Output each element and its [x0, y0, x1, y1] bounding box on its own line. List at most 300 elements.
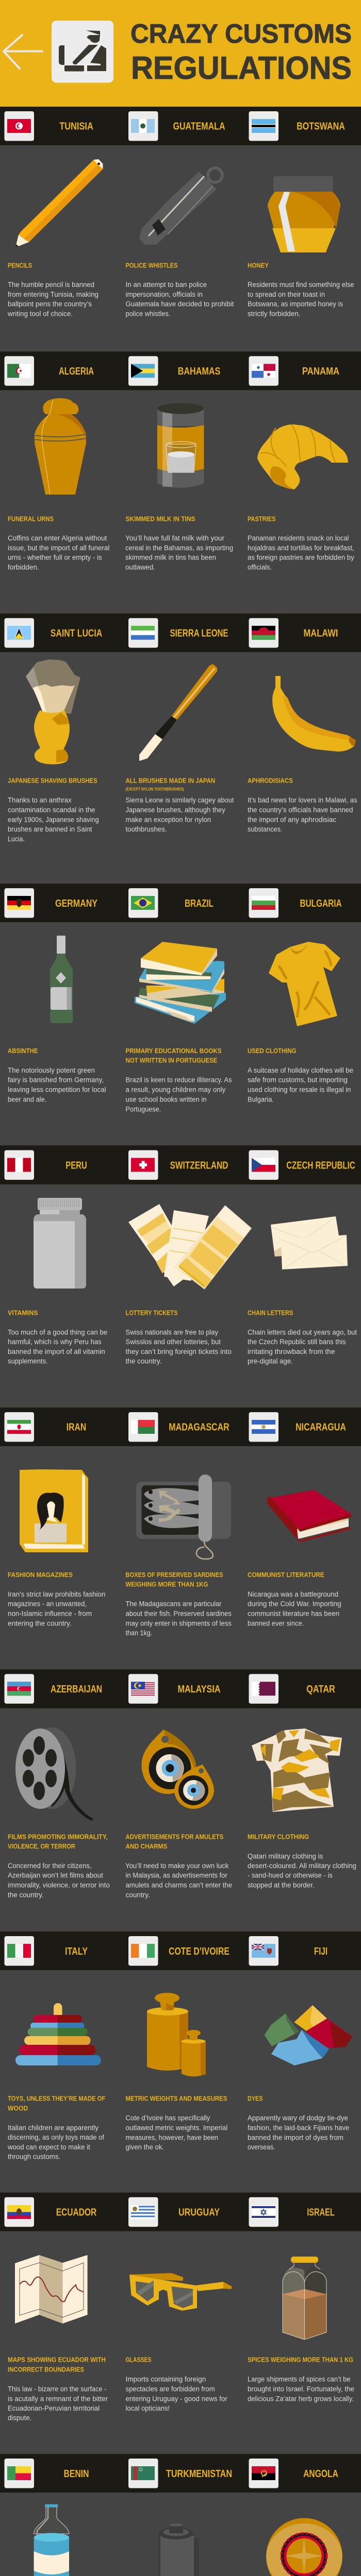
text block: Italian children are apparently [8, 2124, 99, 2131]
text block: desert-coloured. All military clothing [248, 1862, 356, 1870]
text block: It’s bad news for lovers in Malawi, as [248, 796, 357, 804]
text block: a result, young children may only [126, 1086, 225, 1094]
country name: Iran: IRAN [67, 1422, 86, 1433]
icon: absinthe bottle [50, 936, 73, 1023]
item: spices weighing more than 1 kg [248, 2257, 354, 2402]
text block [248, 2114, 349, 2151]
text block: from entering Tunisia, making [8, 291, 99, 298]
icon: left arrow [4, 35, 42, 69]
text block: issue, but the import of all funeral [8, 544, 109, 552]
text block: Panaman residents snack on local [248, 534, 349, 542]
heading: absinthe: ABSINTHE [8, 1047, 38, 1055]
band: Azerbaijan, Malaysia, Qatar [0, 1669, 361, 1708]
icon: red book [267, 1490, 352, 1542]
text block: make an exception for nylon [126, 816, 211, 823]
country name: Germany: GERMANY [55, 898, 98, 909]
heading: maps showing Ecuador: INCORRECT BOUNDARIES [8, 2365, 84, 2373]
note: (EXCEPT NYLON TOOTHBRUSHES) [126, 787, 184, 791]
heading: advertisements for amulets: AND CHARMS [126, 1842, 168, 1850]
text block: wood can expect to make it [7, 2143, 90, 2151]
text block: Brazil is keen to reduce illiteracy. As [126, 1076, 232, 1084]
heading: lottery tickets: LOTTERY TICKETS [126, 1309, 178, 1316]
icon: whistle [139, 168, 222, 245]
item: metric weights and measures [126, 1993, 227, 2151]
item: all brushes made in Japan [126, 664, 234, 833]
text block: entering the country. [8, 1619, 72, 1627]
icon: customs officer sign [52, 21, 113, 82]
country name: Malaysia: MALAYSIA [177, 1684, 221, 1695]
text block: Botswana, as imported honey is [248, 300, 343, 308]
item: boxes of preserved sardines [126, 1475, 232, 1637]
icon: film canister [159, 2523, 199, 2576]
flag: Germany [7, 896, 31, 910]
flag: Cote d'Ivoire [131, 1944, 155, 1958]
heading: boxes of preserved sardines: BOXES OF PRESERVED SARDINES [126, 1571, 223, 1579]
text block: Portuguese. [126, 1105, 161, 1113]
text block: pre-digital age. [248, 1358, 293, 1365]
icon: honey jar [268, 176, 340, 252]
text block: Residents must find something else [248, 281, 354, 289]
text block: Sierra Leone is similarly cagey about [126, 796, 234, 804]
heading: police whistles: POLICE WHISTLES [126, 261, 178, 269]
flag: Israel [252, 2205, 275, 2219]
text block: - sand-hued or otherwise - is [248, 1872, 333, 1879]
heading: honey: HONEY [248, 261, 269, 269]
item: pastries [248, 425, 354, 571]
text block [125, 1862, 232, 1899]
item: advertisements for amulets [125, 1730, 232, 1899]
text block: Azerbaijan won’t let films about [8, 1872, 103, 1879]
text block [8, 1328, 107, 1365]
text block: fairy is banished from Germany, [8, 1076, 104, 1084]
text block: entering Uruguay - good news for [126, 2395, 227, 2402]
text block: beer and ale. [8, 1095, 46, 1103]
text block: the country. [8, 1891, 44, 1899]
icon: sardine can [136, 1475, 231, 1559]
text block [126, 1600, 232, 1637]
text block: the country’s officials have banned [248, 806, 353, 814]
heading: primary educational books [126, 1047, 222, 1064]
text block: early 1900s, Japanese shaving [8, 816, 99, 823]
item: toys [7, 2003, 105, 2161]
heading: pastries: PASTRIES [248, 515, 276, 522]
flag: Fiji [252, 1944, 275, 1958]
text block: through customs. [8, 2153, 60, 2161]
text block: substances. [248, 825, 282, 833]
text block [126, 2376, 227, 2412]
text block: outlawed metric weights. Imperial [126, 2124, 227, 2131]
heading: advertisements for amulets: ADVERTISEMENTS FOR AMULETS [126, 1833, 223, 1840]
heading: glasses: GLASSES [126, 2356, 152, 2364]
flag: Tunisia [7, 119, 31, 133]
text block: banned ever since. [248, 1619, 304, 1627]
text block: harmful, which is why Peru has [8, 1338, 102, 1346]
text block: urns - whether full or empty - is [8, 554, 102, 562]
text block: non-Islamic influence - from [8, 1610, 92, 1618]
text block [126, 1076, 232, 1113]
text block: Concerned for their citizens, [8, 1862, 92, 1870]
text block: use school books written in [126, 1095, 206, 1103]
icon: paint brush [139, 664, 217, 761]
heading: boxes of preserved sardines [126, 1571, 223, 1588]
text block: Ecuadorian-Peruvian territorial [8, 2404, 100, 2412]
text block: brought into Israel. Fortunately, the [248, 2385, 354, 2393]
text block: about their fish. Preserved sardines [126, 1610, 232, 1618]
text block: contamination scandal in the [8, 806, 95, 814]
text block [248, 1328, 357, 1365]
text block: country. [126, 1891, 150, 1899]
text block: given the ok. [126, 2143, 164, 2151]
text block: amulets and charms can’t enter the [126, 1882, 232, 1889]
text block: than 1kg. [126, 1629, 152, 1637]
heading: communist literature: COMMUNIST LITERATURE [248, 1571, 324, 1579]
icon: evil eye amulets [141, 1730, 214, 1809]
text block: in Malaysia, as advertisements for [126, 1872, 227, 1879]
flag: Switzerland [131, 1158, 155, 1172]
text block: brushes are banned in Saint [8, 825, 92, 833]
flag: Iran [7, 1420, 31, 1434]
text block: supplements. [8, 1358, 48, 1365]
item: roulette [248, 2518, 353, 2576]
text block [248, 1852, 356, 1889]
text block: Japanese brushes, although they [126, 806, 225, 814]
text block [8, 1590, 105, 1627]
country name: Saint Lucia: SAINT LUCIA [51, 628, 102, 639]
flag: Turkmenistan [131, 2466, 155, 2480]
item: honey [248, 176, 354, 318]
text block: Qatari military clothing is [248, 1852, 323, 1860]
text block: In an attempt to ban police [126, 281, 207, 289]
heading: films promoting immorality: VIOLENCE, OR TERROR [8, 1842, 75, 1850]
flag: Guatemala [131, 119, 155, 133]
heading: toys: TOYS, UNLESS THEY’RE MADE OF [8, 2095, 105, 2103]
text block: the Czech Republic still bans this [248, 1338, 346, 1346]
item: pencils [7, 159, 103, 318]
heading: maps showing Ecuador [8, 2356, 106, 2373]
heading: films promoting immorality: FILMS PROMOTING IMMORALITY, [8, 1833, 108, 1840]
heading: toys: WOOD [8, 2104, 28, 2112]
text block [126, 2114, 227, 2151]
flag: Brazil [131, 896, 155, 910]
icon: pencil [15, 159, 103, 247]
title: REGULATIONS [131, 50, 352, 86]
band: Iran, Madagascar, Nicaragua [0, 1408, 361, 1446]
flag: Madagascar [131, 1420, 155, 1434]
text block: the country. [126, 1358, 162, 1365]
icon: shaving brush [26, 659, 80, 765]
heading: skimmed milk in tins: SKIMMED MILK IN TINS [126, 515, 195, 522]
item: undeveloped film [125, 2523, 231, 2576]
text block: overseas. [248, 2143, 275, 2151]
heading: funeral urns: FUNERAL URNS [8, 515, 54, 522]
heading: used clothing: USED CLOTHING [248, 1047, 297, 1055]
heading: maps showing Ecuador: MAPS SHOWING ECUADOR WITH [8, 2356, 106, 2364]
text block [248, 1066, 353, 1103]
country name: Turkmenistan: TURKMENISTAN [166, 2468, 232, 2480]
text block: dispute. [8, 2414, 31, 2422]
text block: skimmed milk in tins has been [125, 554, 216, 562]
heading: fashion magazines: FASHION MAGAZINES [8, 1571, 73, 1579]
country name: Angola: ANGOLA [303, 2468, 338, 2480]
item: aphrodisiacs [248, 676, 357, 833]
flag: Algeria [7, 364, 31, 378]
heading: pencils: PENCILS [8, 261, 32, 269]
flag: Saint Lucia [7, 626, 31, 640]
band: Tunisia, Guatemala, Botswana [0, 107, 361, 145]
icon: weights [147, 1993, 206, 2076]
item: communist literature [248, 1490, 352, 1627]
heading: metric weights and measures: METRIC WEIGHTS AND MEASURES [126, 2095, 227, 2103]
text block: writing tool of choice. [7, 310, 73, 318]
item: maps showing Ecuador [8, 2255, 108, 2422]
item: films promoting immorality [8, 1727, 110, 1899]
country name: Bulgaria: BULGARIA [300, 898, 342, 909]
text block: Apparently wary of dodgy tie-dye [248, 2114, 348, 2122]
icon: magazine [20, 1469, 88, 1552]
text block: safe from customs, but importing [248, 1076, 348, 1084]
icon: croissant [257, 425, 348, 489]
item: glasses [126, 2273, 232, 2412]
text block: is acutally a remnant of the bitter [8, 2395, 108, 2402]
text block: You’ll have full fat milk with your [125, 534, 225, 542]
flag: Nicaragua [252, 1420, 275, 1434]
flag: Bulgaria [252, 896, 275, 910]
text block: The humble pencil is banned [8, 281, 94, 289]
text block: officials. [248, 564, 272, 571]
header banner [0, 0, 361, 107]
country name: Azerbaijan: AZERBAIJAN [51, 1684, 102, 1695]
text block: strictly forbidden. [248, 310, 301, 318]
text block [126, 796, 234, 833]
country name: Peru: PERU [65, 1160, 87, 1172]
flag: Bahamas [131, 364, 155, 378]
text block: immorality, violence, or terror into [8, 1882, 110, 1889]
country name: Benin: BENIN [64, 2468, 89, 2480]
text block: ballpoint pens the country’s [8, 300, 92, 308]
text block: the import of any aphrodisiac [248, 816, 336, 823]
text block: delicious Za’atar herb grows locally. [248, 2395, 354, 2402]
text block [248, 2376, 354, 2402]
text block [126, 1328, 232, 1365]
icon: urn [35, 398, 86, 495]
icon: piles of dye [264, 2005, 352, 2065]
heading: chain letters: CHAIN LETTERS [248, 1309, 293, 1316]
item: skimmed milk in tins [125, 403, 233, 571]
heading: advertisements for amulets [126, 1833, 223, 1850]
country name: Fiji: FIJI [314, 1946, 327, 1957]
flag: Azerbaijan [7, 1682, 31, 1696]
country name: Israel: ISRAEL [307, 2207, 335, 2218]
text block: Nicaragua was a battleground [248, 1590, 338, 1598]
band: Peru, Switzerland, Czech Republic [0, 1145, 361, 1184]
text block [248, 281, 354, 318]
icon: roulette wheel [266, 2518, 342, 2576]
text block: Thanks to an anthrax [8, 796, 72, 804]
item: police whistles [126, 168, 234, 318]
text block: they can’t bring foreign tickets into [126, 1348, 232, 1355]
icon: envelopes [271, 1216, 348, 1269]
text block: discerning, as only toys made of [8, 2133, 104, 2141]
flag: Benin [7, 2466, 31, 2480]
text block: may only enter in shipments of less [126, 1619, 232, 1627]
text block: This law - bizarre on the surface - [8, 2385, 106, 2393]
icon: milk tin [157, 403, 204, 488]
country name: Bahamas: BAHAMAS [178, 366, 220, 377]
text block: Guatemala have decided to prohibit [126, 300, 234, 308]
flag: Uruguay [131, 2205, 155, 2219]
text block [8, 796, 99, 843]
item: lottery tickets [126, 1204, 252, 1365]
text block [8, 534, 109, 571]
item: funeral urns [8, 398, 109, 571]
text block: You’ll need to make your own luck [125, 1862, 229, 1870]
text block: Bulgaria. [248, 1095, 274, 1103]
text block [8, 1066, 106, 1103]
text block: used clothing for resale is illegal in [248, 1086, 351, 1094]
text block: Too much of a good thing can be [8, 1328, 107, 1336]
item: vitamins [8, 1198, 107, 1365]
text block: police whistles. [126, 310, 170, 318]
country name: Ecuador: ECUADOR [56, 2207, 97, 2218]
heading: dyes: DYES [248, 2095, 263, 2103]
text block: magazines - an unwanted, [8, 1600, 87, 1608]
heading: boxes of preserved sardines: WEIGHING MORE THAN 1KG [126, 1581, 208, 1588]
country name: Malawi: MALAWI [303, 628, 338, 639]
text block: outlawed. [125, 564, 155, 571]
text block: Coffins can enter Algeria without [8, 534, 107, 542]
icon: folded map [15, 2255, 88, 2324]
text block: Cote d’Ivoire has specifically [126, 2114, 210, 2122]
country name: Brazil: BRAZIL [185, 898, 214, 909]
text block: stopped at the border. [248, 1882, 315, 1889]
title: CRAZY CUSTOMS [130, 19, 352, 49]
item: Japanese shaving brushes [8, 659, 99, 843]
text block: Lucia. [8, 835, 25, 843]
flag: Qatar [252, 1682, 275, 1696]
text block: to spread on their toast in [248, 291, 325, 298]
text block: The Madagascans are particular [126, 1600, 222, 1608]
text block: A suitcase of holiday clothes will be [248, 1066, 353, 1074]
text block: leaving less competition for local [8, 1086, 106, 1094]
text block [8, 2385, 108, 2422]
flag: Botswana [252, 119, 275, 133]
icon: t-shirt [269, 942, 340, 1026]
text block [7, 2124, 104, 2161]
text block: Swisslos and other lotteries, but [126, 1338, 221, 1346]
band: Algeria, Bahamas, Panama [0, 351, 361, 390]
heading: military clothing: MILITARY CLOTHING [248, 1833, 309, 1840]
band: Italy, Cote d'Ivoire, Fiji [0, 1931, 361, 1970]
text block: forbidden. [8, 564, 39, 571]
text block [7, 281, 99, 318]
text block [248, 534, 354, 571]
heading: all brushes made in Japan: ALL BRUSHES MADE IN JAPAN [126, 777, 215, 785]
heading: films promoting immorality [8, 1833, 108, 1850]
flag: Malawi [252, 626, 275, 640]
country name: Sierra Leone: SIERRA LEONE [170, 628, 228, 639]
item: absinthe [8, 936, 106, 1103]
country name: Uruguay: URUGUAY [178, 2207, 220, 2218]
text block: spectacles are forbidden from [126, 2385, 215, 2393]
band: Ecuador, Uruguay, Israel [0, 2193, 361, 2231]
text block: Chain letters died out years ago, but [248, 1328, 357, 1336]
text block: Iran’s strict law prohibits fashion [8, 1590, 105, 1598]
text block: banned the import of all vitamin [8, 1348, 105, 1355]
country name: Botswana: BOTSWANA [297, 121, 345, 132]
icon: stack of books [135, 942, 226, 1024]
text block: Imports containing foreign [126, 2376, 206, 2383]
text block: Large shipments of spices can’t be [248, 2376, 351, 2383]
item: fashion magazines [8, 1469, 105, 1627]
text block: impersonation, officials in [126, 291, 203, 298]
flag: Sierra Leone [131, 626, 155, 640]
icon: lottery tickets [128, 1204, 252, 1289]
text block: as foreign pastries are forbidden by [248, 554, 354, 562]
icon: film reel [15, 1727, 93, 1821]
band: Germany, Brazil, Bulgaria [0, 884, 361, 922]
flag: Czech Republic [252, 1158, 275, 1172]
flag: Panama [252, 364, 275, 378]
icon: spice bottle [283, 2257, 326, 2340]
country name: Panama: PANAMA [302, 366, 339, 377]
icon: vitamin bottle [34, 1198, 86, 1289]
country name: Guatemala: GUATEMALA [173, 121, 225, 132]
flag: Malaysia [131, 1682, 155, 1696]
text block: hojaldras and tortillas for breakfast, [248, 544, 354, 552]
item: dyes [248, 2005, 352, 2151]
text block: The notoriously potent green [8, 1066, 95, 1074]
text block [248, 796, 357, 833]
heading: vitamins: VITAMINS [8, 1309, 38, 1316]
band: Benin, Turkmenistan, Angola [0, 2454, 361, 2493]
heading: primary educational books: PRIMARY EDUCATIONAL BOOKS [126, 1047, 222, 1055]
text block: local opticians! [126, 2404, 170, 2412]
country name: Tunisia: TUNISIA [59, 121, 93, 132]
title [130, 19, 352, 86]
text block: measures, however, have been [126, 2133, 218, 2141]
flag: Ecuador [7, 2205, 31, 2219]
heading: Japanese shaving brushes: JAPANESE SHAVING BRUSHES [8, 777, 97, 785]
icon: camouflage t-shirt [252, 1728, 342, 1812]
item: military clothing [248, 1728, 356, 1889]
text block [125, 534, 233, 571]
flag: Angola [252, 2466, 275, 2480]
text block [248, 1590, 341, 1627]
band: Saint Lucia, Sierra Leone, Malawi [0, 614, 361, 652]
icon: water bottle [34, 2504, 69, 2576]
icon: glasses [129, 2273, 232, 2311]
country name: Algeria: ALGERIA [59, 366, 94, 377]
heading: primary educational books: NOT WRITTEN IN PORTUGUESE [126, 1057, 217, 1064]
text block: during the Cold War. Importing [248, 1600, 341, 1608]
text block [8, 1862, 110, 1899]
text block: cereal in the Bahamas, as importing [125, 544, 233, 552]
country name: Cote d'Ivoire: COTE D’IVOIRE [169, 1946, 229, 1957]
country name: Switzerland: SWITZERLAND [170, 1160, 228, 1172]
icon: banana [272, 676, 356, 752]
text block: Swiss nationals are free to play [126, 1328, 218, 1336]
item: primary educational books [126, 942, 232, 1113]
text block: communist literature has been [248, 1610, 339, 1618]
text block: fashion, the laid-back Fijians have [248, 2124, 349, 2131]
country name: Qatar: QATAR [306, 1684, 335, 1695]
item: chain letters [248, 1216, 357, 1365]
icon: stacking rings toy [15, 2003, 101, 2065]
text block: banned the import of dyes from [248, 2133, 343, 2141]
flag: Peru [7, 1158, 31, 1172]
country name: Italy: ITALY [65, 1946, 88, 1957]
item: mineral water [7, 2504, 103, 2576]
